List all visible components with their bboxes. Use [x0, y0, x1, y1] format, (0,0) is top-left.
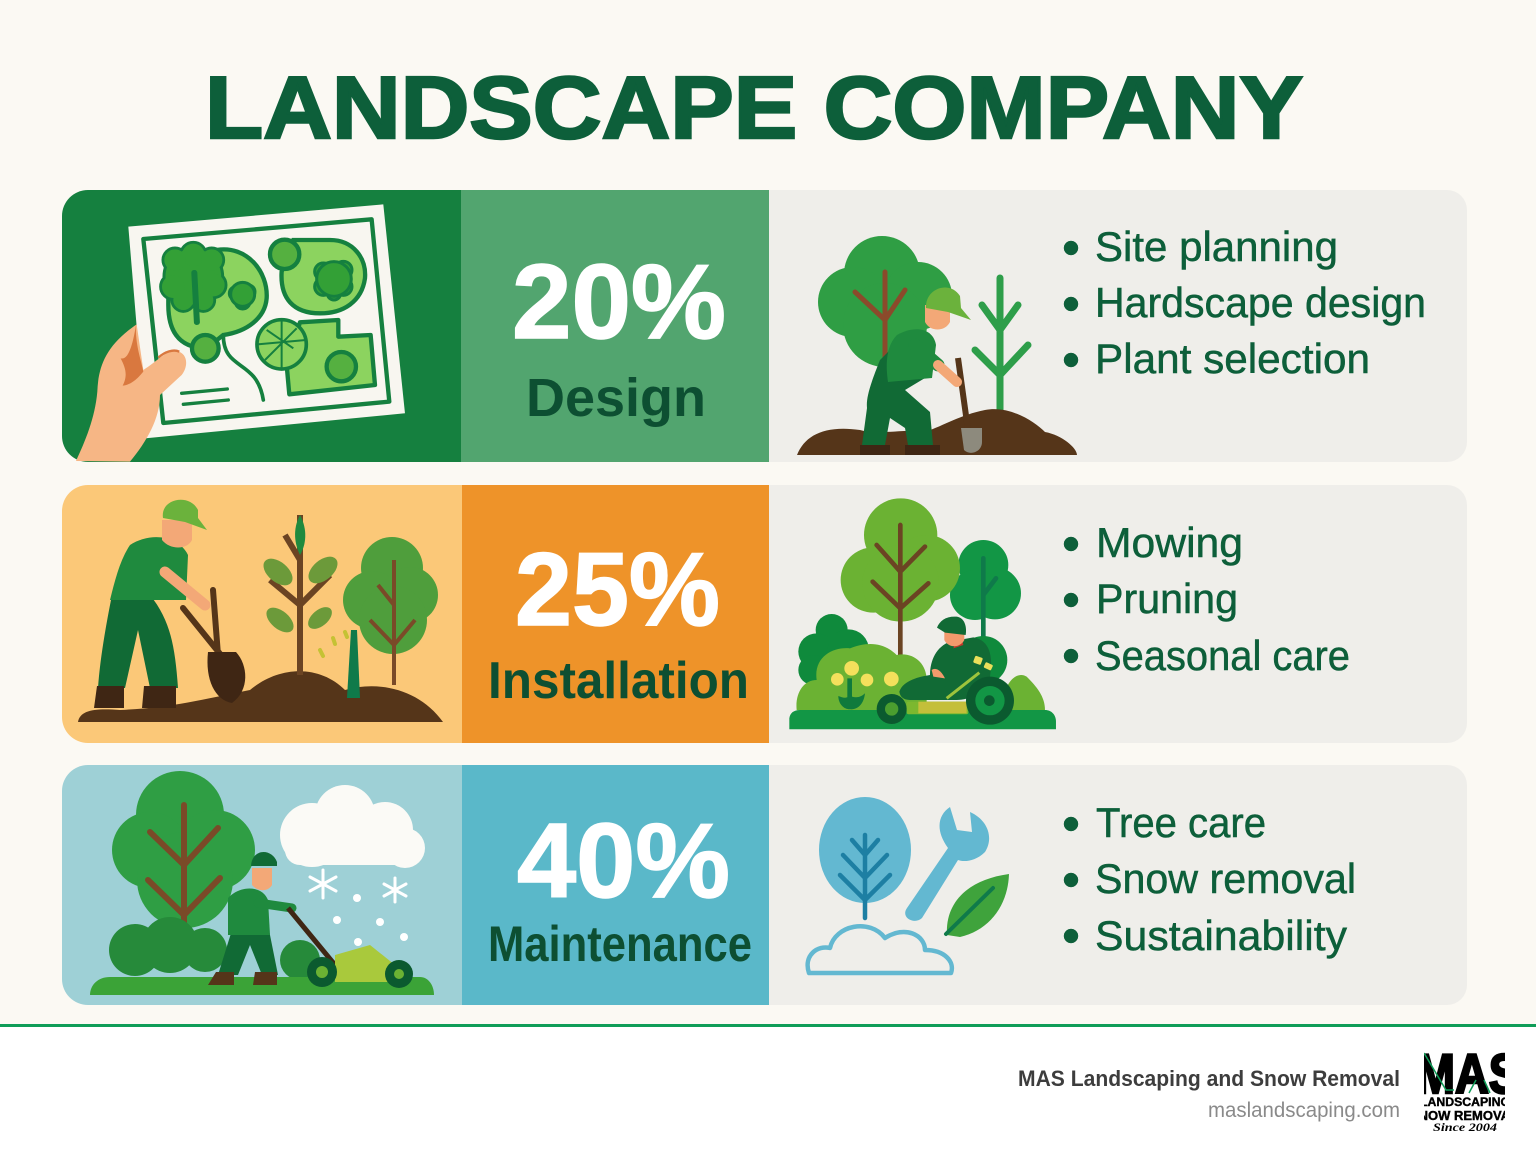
list: installation services: Mowing [1096, 519, 1243, 566]
stat: 20%: 20% [512, 243, 726, 361]
label: Design: Design [526, 368, 706, 428]
installation stat panel [462, 485, 769, 743]
list: maintenance services: Sustainability [1095, 912, 1347, 959]
logo [1410, 1042, 1520, 1134]
logo: Since 2004 [1433, 1120, 1497, 1134]
illustration: mowing under snowy cloud [90, 771, 434, 995]
maintenance image panel [62, 765, 462, 1005]
company name: MAS Landscaping and Snow Removal [1018, 1066, 1400, 1091]
logo: LANDSCAPING [1420, 1095, 1510, 1109]
design stat panel [461, 190, 769, 462]
list: maintenance services: Snow removal [1095, 855, 1356, 902]
list: installation services: Pruning [1096, 575, 1238, 622]
list: installation services: Seasonal care [1095, 632, 1350, 679]
installation details panel [769, 485, 1467, 743]
website: maslandscaping.com [1208, 1099, 1400, 1122]
label: Maintenance: Maintenance [488, 916, 752, 972]
list: maintenance services [1064, 799, 1356, 959]
list: design services: Site planning [1095, 223, 1338, 270]
logo: SNOW REMOVAL [1410, 1109, 1518, 1123]
list: design services: Hardscape design [1095, 279, 1426, 326]
installation image panel [62, 485, 462, 743]
illustration: gardener planting trees [78, 500, 443, 722]
icon: tree, wrench, leaf and cloud [808, 797, 1009, 973]
icon: landscape plan held in hand [76, 204, 405, 462]
maintenance details panel [769, 765, 1467, 1005]
list: design services [1064, 223, 1426, 382]
list: installation services [1064, 519, 1350, 679]
list: maintenance services: Tree care [1096, 799, 1266, 846]
panel: installation row [62, 485, 1467, 743]
title: LANDSCAPE COMPANY [205, 58, 1303, 157]
design details panel [769, 190, 1467, 462]
maintenance stat panel [462, 765, 769, 1005]
footer [0, 1024, 1536, 1154]
panel: maintenance row [62, 765, 1467, 1005]
list: design services: Plant selection [1095, 335, 1370, 382]
design image panel [62, 190, 461, 462]
illustration: gardener digging beside tree [797, 236, 1077, 455]
illustration: mowing garden with trees [789, 498, 1056, 729]
stat: 25%: 25% [515, 532, 720, 648]
stat: 40%: 40% [517, 802, 730, 920]
label: Installation: Installation [488, 652, 749, 710]
panel: design row [62, 190, 1467, 462]
